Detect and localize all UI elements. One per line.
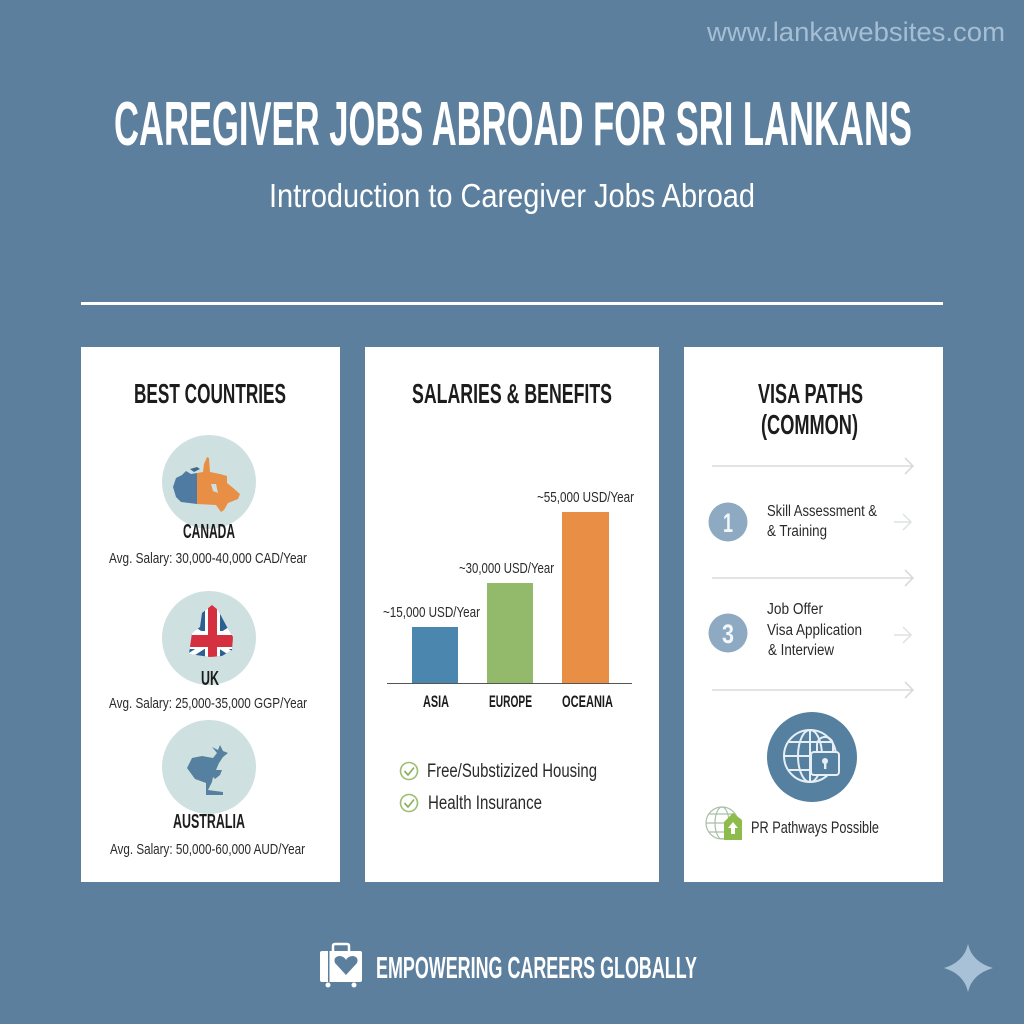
icon: small globe with green shield: [706, 807, 742, 840]
step 1: Skill Assessment &: [767, 503, 878, 520]
icon: sparkle: [944, 944, 993, 992]
icon: suitcase with heart: [320, 944, 362, 988]
bar chart: ASIA: [423, 692, 449, 711]
step 3: [708, 601, 862, 659]
step 3: 3: [722, 619, 734, 649]
step 1: 1: [723, 508, 733, 538]
arrow: middle: [712, 570, 913, 586]
salary: canada: Avg. Salary: 30,000-40,000 CAD/Year: [109, 550, 307, 567]
step 1: & Training: [767, 523, 827, 540]
bar chart: EUROPE: [489, 692, 532, 711]
arrow: top: [712, 458, 913, 474]
heading: best countries: BEST COUNTRIES: [134, 378, 286, 409]
bar chart: OCEANIA: [562, 692, 613, 711]
bar chart: ~15,000 USD/Year: [383, 604, 480, 621]
footer: [320, 944, 697, 988]
heading: visa paths: [758, 378, 863, 440]
salary: uk: Avg. Salary: 25,000-35,000 GGP/Year: [109, 695, 307, 712]
subtitle: Introduction to Caregiver Jobs Abroad: [269, 177, 755, 214]
arrow: step 1: [894, 514, 911, 530]
bar chart: ~55,000 USD/Year: [537, 489, 634, 506]
arrow: bottom: [712, 682, 913, 698]
panel: best countries: [81, 347, 340, 882]
label: uk: UK: [201, 668, 219, 690]
website url: www.lankawebsites.com: [706, 17, 1005, 47]
label: australia: AUSTRALIA: [173, 811, 245, 833]
footer text: EMPOWERING CAREERS GLOBALLY: [376, 950, 697, 985]
benefit: housing: [400, 761, 597, 782]
bar chart: [383, 489, 634, 711]
heading: salaries and benefits: SALARIES & BENEFITS: [412, 378, 612, 409]
heading: visa paths: (COMMON): [761, 409, 858, 440]
panel: visa paths: [684, 347, 943, 882]
benefit: health insurance: [400, 793, 542, 814]
panel: salaries and benefits: [365, 347, 659, 882]
benefit: housing: Free/Substizized Housing: [427, 761, 597, 782]
icon: canada map: [162, 435, 256, 529]
bar chart: ~30,000 USD/Year: [459, 560, 554, 577]
icon: kangaroo: [162, 720, 256, 814]
benefit: health insurance: Health Insurance: [428, 793, 542, 814]
salary: australia: Avg. Salary: 50,000-60,000 AUD/Year: [110, 841, 305, 858]
step 3: & Interview: [768, 642, 835, 659]
label: canada: CANADA: [183, 521, 235, 543]
label: pr pathways: PR Pathways Possible: [751, 819, 879, 837]
step 3: Visa Application: [767, 622, 862, 639]
step 1: [708, 502, 878, 542]
heading: visa paths: VISA PATHS: [758, 378, 863, 409]
icon: uk flag map: [162, 591, 256, 685]
icon: globe with lock: [767, 712, 857, 802]
arrow: step 3: [894, 627, 911, 643]
step 3: Job Offer: [767, 601, 823, 618]
